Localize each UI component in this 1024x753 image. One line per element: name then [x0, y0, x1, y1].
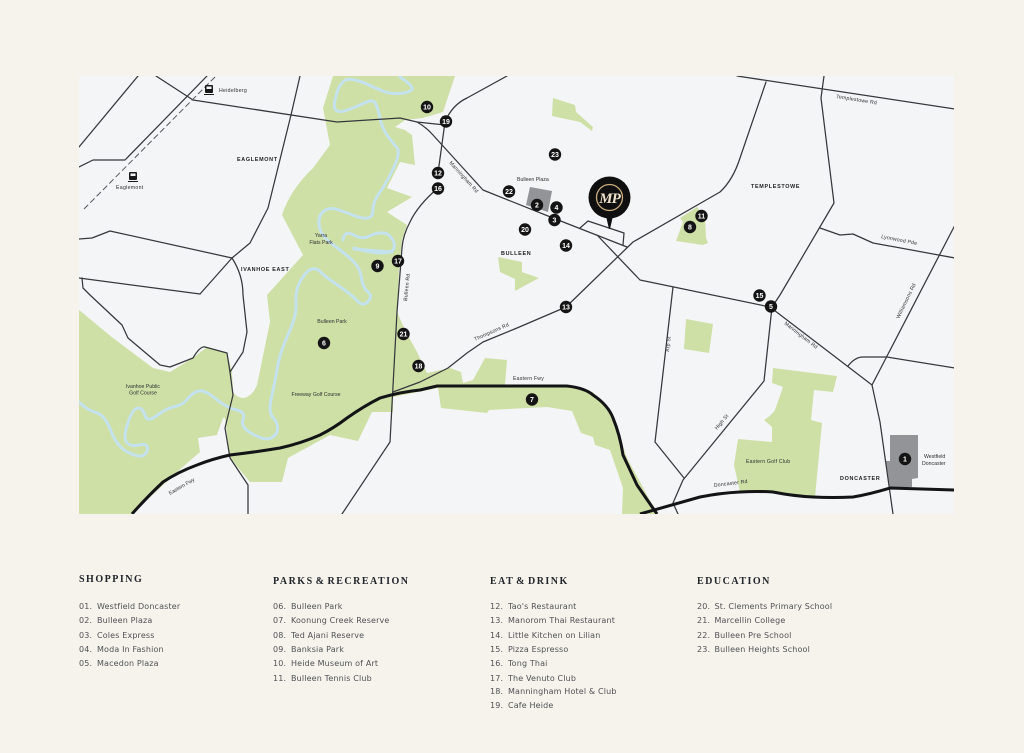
- legend: parks and recreation: [273, 576, 410, 683]
- numbered markers: 23: [551, 152, 559, 159]
- map labels: Bulleen Plaza: [517, 177, 549, 183]
- legend: parks and recreation: 10.: [273, 659, 286, 668]
- legend: education: Bulleen Pre School: [714, 631, 791, 640]
- lake: [354, 249, 392, 252]
- legend: shopping: Coles Express: [97, 631, 155, 640]
- legend: shopping: Westfield Doncaster: [97, 602, 181, 611]
- legend: parks and recreation: Banksia Park: [291, 645, 344, 654]
- legend: education: 21.: [697, 616, 710, 625]
- river: Yarra Flats lagoon: [343, 233, 394, 253]
- panel: map: [79, 76, 955, 514]
- map labels: DONCASTER: [840, 476, 880, 482]
- legend: parks and recreation: Koonung Creek Reserve: [291, 616, 390, 625]
- legend: eat and drink: 18.: [490, 687, 503, 696]
- numbered markers: 19: [442, 119, 450, 126]
- map labels: [116, 88, 946, 497]
- park: north reserve: [552, 98, 593, 131]
- map labels: Lynnwood Pde: [881, 234, 918, 247]
- map labels: High St: [714, 413, 731, 431]
- legend: shopping: 05.: [79, 659, 92, 668]
- legend: parks and recreation: PARKS & RECREATION: [273, 576, 410, 587]
- map labels: Golf Course: [129, 390, 157, 396]
- legend: education: 22.: [697, 631, 710, 640]
- numbered markers: 5: [769, 304, 773, 311]
- map labels: Eastern Fwy: [168, 477, 196, 497]
- map labels: Bulleen Park: [317, 319, 347, 325]
- map labels: Eastern Fwy: [513, 376, 544, 382]
- map labels: Doncaster: [922, 461, 946, 467]
- legend: education: Bulleen Heights School: [714, 645, 810, 654]
- legend: shopping: 04.: [79, 645, 92, 654]
- legend: parks and recreation: 09.: [273, 645, 286, 654]
- map labels: Eastern Golf Club: [746, 459, 790, 465]
- freeway: Doncaster section: [640, 488, 955, 514]
- map labels: Heidelberg: [219, 88, 247, 94]
- map labels: Yarra: [315, 233, 327, 239]
- map labels: IVANHOE EAST: [241, 267, 289, 273]
- park: square reserve: [684, 319, 713, 353]
- legend: parks and recreation: 06.: [273, 602, 286, 611]
- map labels: Flats Park: [309, 240, 333, 246]
- park: Eastern Golf Club: [734, 368, 837, 497]
- numbered markers: 22: [505, 189, 513, 196]
- legend: eat and drink: Tao's Restaurant: [507, 602, 576, 611]
- map labels: EAGLEMONT: [237, 157, 278, 163]
- legend: eat and drink: EAT & DRINK: [490, 576, 569, 587]
- freeway: Eastern Fwy: [132, 386, 657, 514]
- building: Bulleen Plaza: [526, 187, 552, 212]
- legend: eat and drink: Tong Thai: [507, 659, 548, 668]
- map labels: Manningham Rd: [448, 160, 479, 195]
- map labels: Manningham Rd: [783, 321, 819, 351]
- legend: shopping: 03.: [79, 631, 92, 640]
- legend: eat and drink: Little Kitchen on Lilian: [508, 631, 600, 640]
- legend: parks and recreation: Heide Museum of Art: [291, 659, 378, 668]
- numbered markers: 18: [415, 364, 422, 370]
- map labels: Arp St: [665, 336, 673, 352]
- numbered markers: 16: [434, 186, 442, 193]
- icon: Eaglemont train: [128, 172, 138, 182]
- legend: parks and recreation: 07.: [273, 616, 286, 625]
- rail line: [82, 77, 215, 211]
- legend: shopping: SHOPPING: [79, 574, 143, 585]
- legend: parks and recreation: 11.: [273, 674, 286, 683]
- legend: eat and drink: 17.: [490, 674, 503, 683]
- numbered markers: 13: [562, 304, 570, 312]
- legend: parks and recreation: 08.: [273, 631, 286, 640]
- legend: eat and drink: 14.: [490, 631, 503, 640]
- map labels: Thompsons Rd: [473, 322, 510, 343]
- map labels: Bulleen Rd: [403, 273, 412, 301]
- map labels: BULLEEN: [501, 251, 531, 257]
- numbered markers: 4: [555, 205, 559, 212]
- legend: education: 20.: [697, 602, 710, 611]
- legend: eat and drink: 15.: [490, 645, 503, 654]
- numbered markers: [318, 101, 911, 465]
- legend: eat and drink: 19.: [490, 701, 503, 710]
- legend: education: Marcellin College: [714, 616, 785, 625]
- numbered markers: 1: [903, 456, 907, 464]
- road network: [79, 76, 955, 514]
- building: Westfield Doncaster: [886, 435, 918, 488]
- legend: shopping: Moda In Fashion: [97, 645, 164, 654]
- park: Ted Ajani Reserve: [676, 207, 708, 245]
- numbered markers: 6: [322, 340, 326, 348]
- map labels: Freeway Golf Course: [291, 392, 341, 398]
- numbered markers: 9: [376, 264, 380, 270]
- icon: Heidelberg train: [204, 85, 214, 95]
- legend: shopping: [79, 574, 181, 668]
- legend: eat and drink: Pizza Espresso: [508, 645, 568, 654]
- river: Yarra: [79, 77, 412, 456]
- legend: parks and recreation: Ted Ajani Reserve: [290, 631, 364, 640]
- map labels: Williamsons Rd: [895, 283, 918, 320]
- legend: education: 23.: [697, 645, 710, 654]
- legend: shopping: 01.: [79, 602, 92, 611]
- numbered markers: 8: [688, 224, 692, 232]
- legend: shopping: 02.: [79, 616, 92, 625]
- numbered markers: 12: [434, 170, 442, 178]
- numbered markers: 2: [535, 202, 539, 210]
- legend: eat and drink: Manorom Thai Restaurant: [508, 616, 615, 625]
- legend: education: EDUCATION: [697, 576, 771, 587]
- legend: parks and recreation: Bulleen Tennis Club: [291, 674, 372, 683]
- legend: eat and drink: Manningham Hotel & Club: [508, 687, 617, 696]
- map labels: Doncaster Rd: [714, 479, 748, 489]
- legend: eat and drink: The Venuto Club: [507, 674, 576, 683]
- numbered markers: 21: [400, 332, 407, 338]
- map labels: Eaglemont: [116, 185, 144, 191]
- legend: eat and drink: Cafe Heide: [508, 701, 553, 710]
- numbered markers: 14: [562, 243, 570, 250]
- legend: shopping: Bulleen Plaza: [97, 616, 152, 625]
- park: Bulleen reserve: [498, 257, 539, 291]
- park: Yarra Flats, Bulleen Park and Freeway Golf Course: [79, 76, 658, 514]
- map labels: Templestowe Rd: [836, 94, 877, 106]
- numbered markers: 15: [756, 293, 763, 300]
- legend: eat and drink: 16.: [490, 659, 503, 668]
- numbered markers: 7: [530, 397, 534, 404]
- icon: MP location pin: [588, 176, 630, 229]
- legend: shopping: Macedon Plaza: [97, 659, 159, 668]
- numbered markers: 17: [394, 258, 402, 266]
- icon: MP location pin: MP: [598, 191, 622, 207]
- legend: education: St. Clements Primary School: [714, 602, 832, 611]
- legend: eat and drink: 13.: [490, 616, 503, 625]
- legend: parks and recreation: Bulleen Park: [291, 602, 343, 611]
- legend: education: [697, 576, 832, 654]
- map labels: Westfield: [924, 454, 945, 460]
- numbered markers: 11: [698, 214, 705, 220]
- numbered markers: 3: [553, 218, 557, 224]
- numbered markers: 20: [521, 227, 529, 234]
- legend: eat and drink: 12.: [490, 602, 503, 611]
- numbered markers: 10: [423, 104, 431, 112]
- map labels: TEMPLESTOWE: [751, 184, 800, 190]
- legend: eat and drink: [490, 576, 617, 710]
- map labels: Ivanhoe Public: [126, 384, 160, 390]
